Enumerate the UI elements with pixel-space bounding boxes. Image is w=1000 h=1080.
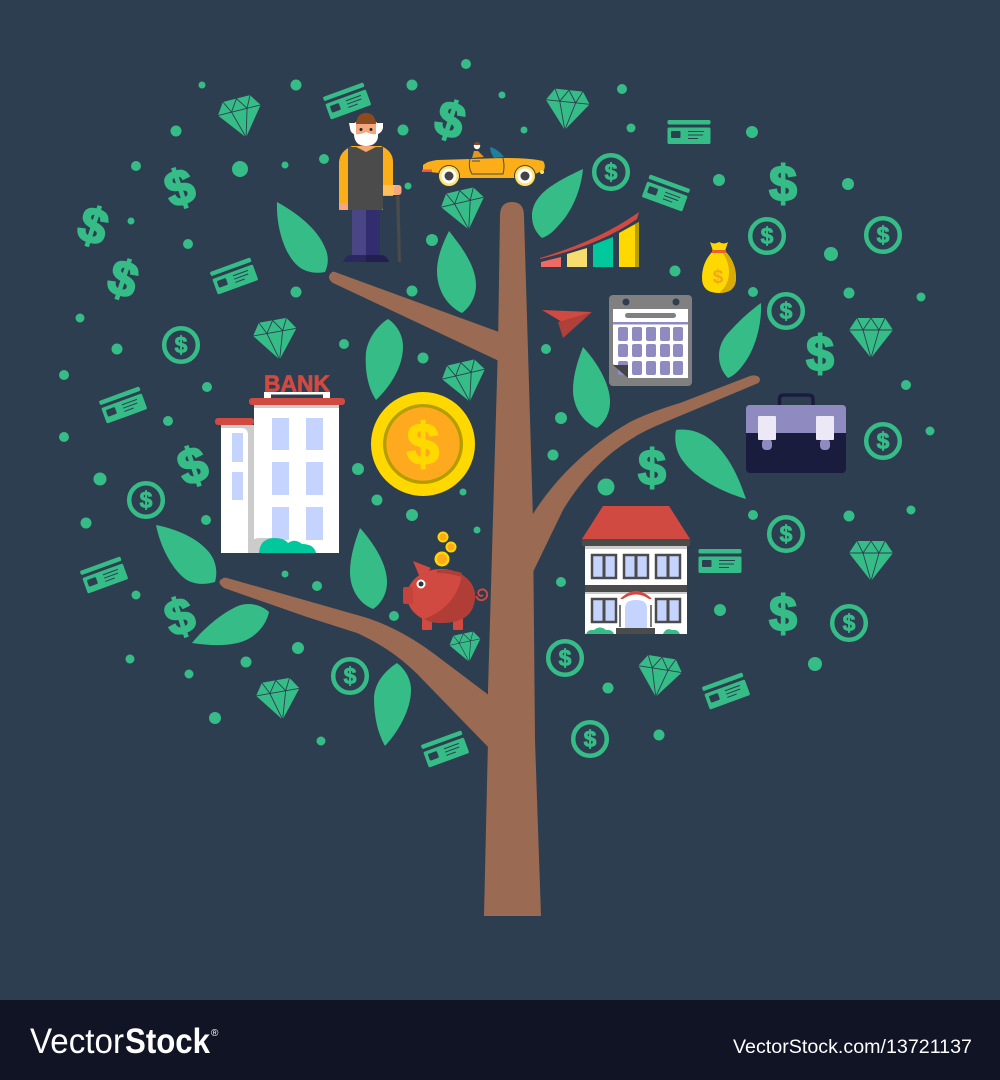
- body: [407, 569, 475, 623]
- house: [582, 506, 690, 634]
- bushes: [586, 628, 614, 634]
- beard: [354, 132, 378, 146]
- coin icon: [164, 328, 198, 362]
- image id: VectorStock.com/13721137: [733, 1037, 972, 1058]
- dollar sign: $: [71, 195, 115, 257]
- coin icon: [769, 294, 803, 328]
- diamond icon: [215, 93, 267, 143]
- door: [625, 600, 647, 628]
- card icon: [80, 556, 128, 594]
- car body: [423, 158, 545, 178]
- leaf: [277, 202, 328, 273]
- hair: [349, 123, 383, 135]
- bars: [541, 257, 561, 267]
- tail: [476, 589, 487, 600]
- bush: [248, 538, 285, 553]
- coin icon: [548, 641, 582, 675]
- date grid: [618, 327, 683, 375]
- ear: [413, 561, 431, 580]
- leaves: [156, 169, 761, 746]
- card icon: [210, 257, 258, 295]
- bag: [702, 242, 736, 293]
- trunk: [484, 202, 541, 916]
- coin icon: [769, 517, 803, 551]
- lower left branch: [219, 578, 490, 749]
- red paper plane: [542, 310, 592, 338]
- card icon: [668, 120, 710, 144]
- money bag: $: [713, 267, 724, 288]
- money bag: [702, 242, 736, 293]
- left wing: [221, 425, 254, 553]
- coin icon: [333, 659, 367, 693]
- big gold coin: [371, 392, 475, 496]
- dollar sign: $: [638, 440, 666, 496]
- big gold coin: $: [407, 412, 439, 477]
- diamond icon: [849, 318, 893, 358]
- left cuff: [339, 203, 348, 210]
- frame: [609, 295, 692, 386]
- eye: [416, 580, 426, 588]
- footer bar: Stock: [125, 1022, 210, 1061]
- vest: [348, 147, 383, 210]
- windshield: [490, 147, 504, 158]
- door lines: [469, 158, 504, 174]
- dollar sign: $: [158, 586, 202, 648]
- scattered diamonds: [215, 88, 893, 724]
- folded corner: [613, 365, 628, 378]
- scattered green dots: [59, 59, 934, 746]
- top flap: [746, 405, 846, 433]
- falling coins: [434, 532, 456, 566]
- card icon: [698, 549, 742, 573]
- scattered dollar coins: [129, 155, 900, 756]
- card icon: [702, 672, 750, 710]
- leaf: [156, 525, 216, 584]
- leaf: [719, 303, 761, 378]
- lower windows: [592, 599, 680, 622]
- diamond icon: [438, 186, 490, 234]
- dollar sign: $: [428, 89, 472, 151]
- driver: [472, 151, 484, 158]
- upper left branch: [329, 272, 499, 361]
- dollar sign: $: [806, 326, 834, 382]
- windows: [272, 418, 323, 540]
- diamond icon: [634, 654, 684, 700]
- page: [613, 309, 688, 378]
- clasps: [762, 439, 772, 450]
- leaf: [437, 231, 476, 313]
- card icon: [323, 82, 371, 120]
- diamond icon: [849, 541, 893, 581]
- right branch: [531, 375, 760, 572]
- brand logo: Vector: [30, 1022, 124, 1061]
- main block: [254, 405, 339, 553]
- card icon: [642, 174, 690, 212]
- wheels: [438, 165, 460, 187]
- dollar sign: $: [769, 156, 797, 212]
- arms: [339, 146, 393, 210]
- rising swoosh: [540, 212, 639, 259]
- leaf: [532, 169, 583, 238]
- coin icon: [866, 424, 900, 458]
- eyes: [360, 128, 372, 131]
- snout: [403, 587, 413, 604]
- card icon: [99, 386, 147, 424]
- yellow convertible car: [422, 142, 545, 187]
- leaf: [573, 347, 610, 428]
- diamond icon: [439, 358, 491, 406]
- piggy bank: [403, 532, 487, 630]
- coin icon: [750, 219, 784, 253]
- coin icon: [573, 722, 607, 756]
- legs: [352, 210, 366, 256]
- briefcase: [746, 395, 846, 473]
- cane: [396, 196, 401, 262]
- diamond icon: [251, 316, 301, 364]
- dollar sign: $: [101, 248, 145, 310]
- forearm and hand: [383, 185, 397, 195]
- upper windows: [592, 555, 680, 578]
- scattered credit cards: [80, 82, 750, 768]
- growth bar chart: [540, 212, 639, 267]
- card icon: [421, 730, 469, 768]
- lower body: [746, 420, 846, 473]
- leaf: [374, 663, 411, 746]
- old man with cane: [339, 113, 402, 262]
- dollar sign: $: [769, 586, 797, 642]
- calendar: [609, 295, 692, 386]
- leaf: [675, 429, 746, 499]
- shoes: [343, 255, 366, 262]
- footer bar: ®: [211, 1028, 219, 1039]
- dollar sign: $: [171, 435, 215, 497]
- diamond icon: [448, 630, 485, 665]
- scattered dollar signs: [71, 89, 834, 648]
- diamond icon: [543, 88, 591, 132]
- diamond icon: [254, 676, 304, 724]
- legs: [422, 618, 432, 630]
- leaf: [366, 319, 403, 400]
- coin icon: [866, 218, 900, 252]
- hat: [356, 113, 376, 124]
- roof: [582, 506, 690, 539]
- coin icon: [832, 606, 866, 640]
- coin icon: [594, 155, 628, 189]
- leaf: [350, 528, 387, 609]
- footer bar: [0, 1000, 1000, 1080]
- bank sign: BANK: [264, 370, 330, 396]
- bank building: [215, 370, 345, 553]
- coin icon: [129, 483, 163, 517]
- handle: [780, 395, 813, 406]
- walls: [585, 546, 687, 634]
- head: [355, 122, 377, 146]
- tree trunk and branches: [219, 202, 760, 916]
- dollar sign: $: [158, 157, 202, 219]
- leaf: [192, 604, 269, 645]
